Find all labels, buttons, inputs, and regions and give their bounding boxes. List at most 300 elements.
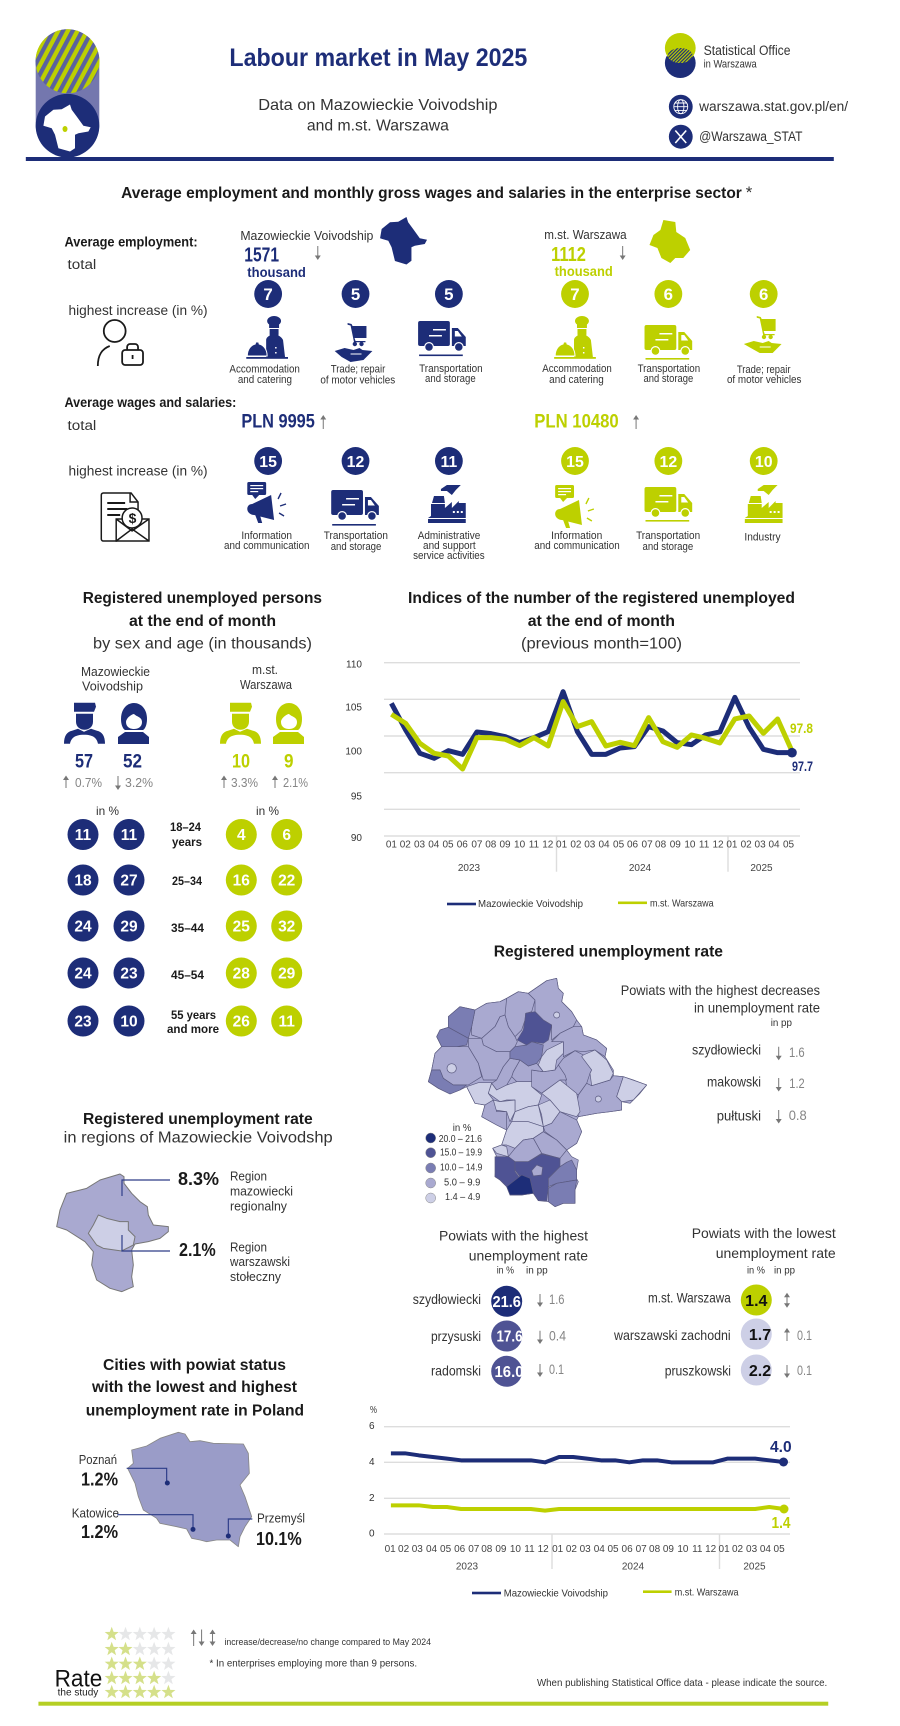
industry labels: Trade; repair <box>331 364 386 376</box>
heading: unemployment rate <box>469 1248 588 1264</box>
value labels: 97.7 <box>792 758 813 774</box>
industry labels: Industry <box>744 532 781 544</box>
value labels <box>790 720 813 774</box>
map legend: 15.0 – 19.9 <box>440 1148 482 1159</box>
heading: Powiats with the highest decreases <box>621 982 820 998</box>
in percent labels: in % <box>96 804 119 818</box>
heading <box>86 1357 304 1420</box>
y axis labels: 2 <box>369 1493 375 1504</box>
age circles: Warszawa: 4 <box>237 827 246 844</box>
age circles: Mazowieckie: 29 <box>120 918 138 936</box>
row: warszawski zachodni: 0.1 <box>797 1327 812 1343</box>
icon: document and envelope <box>101 493 149 541</box>
industry labels: Trade; repair <box>737 364 791 376</box>
value: Katowice: Katowice <box>72 1506 119 1521</box>
row: radomski: radomski <box>431 1363 481 1379</box>
x axis month labels: 04 <box>760 1544 771 1555</box>
increase badges: 5 <box>444 285 454 304</box>
x axis month labels: 2024 <box>629 863 652 874</box>
age labels: 55 years <box>171 1010 216 1022</box>
column labels: m.st. <box>252 663 278 677</box>
age labels: 35–44 <box>171 923 205 935</box>
row: pruszkowski <box>665 1354 812 1386</box>
line: Warszawa <box>391 702 792 769</box>
Warszawa wage: PLN 10480 <box>534 412 619 433</box>
industry labels: and support <box>423 540 476 552</box>
row: szydlowiecki: 21.6 <box>492 1294 521 1311</box>
x axis month labels: 12 <box>705 1544 717 1555</box>
x axis month labels: 2023 <box>456 1562 479 1573</box>
y axis labels: 4 <box>369 1457 375 1468</box>
x axis month labels: 10 <box>510 1544 521 1555</box>
x axis month labels: 11 <box>692 1544 703 1555</box>
row: pultuski <box>717 1107 807 1124</box>
x axis month labels <box>386 840 794 874</box>
icon: chef navy <box>246 316 288 359</box>
Warszawa total: thousand <box>555 263 613 279</box>
legend: Mazowieckie Voivodship <box>478 898 583 910</box>
age labels <box>167 822 219 1036</box>
age circles: Mazowieckie: 11 <box>121 827 138 844</box>
x axis month labels: 04 <box>598 840 610 851</box>
industry labels: and communication <box>224 540 309 552</box>
industry labels: Administrative <box>418 530 480 542</box>
icon: truck lime <box>645 325 692 360</box>
line: Mazowieckie <box>391 1453 783 1462</box>
x axis month labels: 08 <box>481 1544 493 1555</box>
increase badges <box>254 447 778 475</box>
row: warszawski zachodni <box>613 1318 812 1350</box>
rate the study label: the study <box>58 1688 98 1699</box>
icon: factory lime <box>745 485 783 523</box>
heading: Registered unemployment rate <box>83 1111 313 1128</box>
Mazowieckie total <box>240 228 373 280</box>
industry labels <box>229 363 802 386</box>
increase badges: 7 <box>263 285 273 304</box>
map legend: 5.0 – 9.9 <box>444 1178 481 1189</box>
row label: average employment: Average employment: <box>65 233 198 250</box>
industry labels: Transportation <box>638 363 700 375</box>
age circles: Mazowieckie: 10 <box>120 1014 138 1030</box>
column labels: Mazowieckie <box>81 665 150 679</box>
heading <box>692 1225 836 1277</box>
row: przysuski: 17.6 <box>496 1329 523 1346</box>
title: Labour market in May 2025 <box>229 44 527 72</box>
value: region mazowiecki <box>178 1169 293 1214</box>
x axis month labels: 09 <box>670 840 681 851</box>
icon: cart and hand lime <box>744 316 782 353</box>
map legend: in % <box>453 1123 472 1134</box>
x axis month labels: 2024 <box>622 1562 645 1573</box>
value labels: 97.8 <box>790 720 813 736</box>
x axis month labels: 02 <box>400 840 411 851</box>
industry labels: Information <box>241 530 292 542</box>
heading: at the end of month <box>528 613 675 630</box>
heading: in pp <box>526 1265 548 1277</box>
panel: registered unemployed persons <box>63 590 322 1036</box>
line: Warszawa <box>391 1505 784 1511</box>
y axis labels: 90 <box>351 833 362 844</box>
icon: megaphone navy <box>247 482 286 523</box>
value labels: 4.0 <box>770 1439 792 1456</box>
increase badges: 11 <box>440 454 457 471</box>
website link: warszawa.stat.gov.pl/en/ <box>698 98 848 114</box>
totals: 10 <box>232 752 250 773</box>
panel: regions of Mazowieckie <box>57 1111 333 1292</box>
row: makowski: 1.2 <box>789 1075 805 1091</box>
value labels <box>770 1439 792 1532</box>
Mazowieckie total: Mazowieckie Voivodship <box>240 228 373 243</box>
row: makowski: makowski <box>707 1074 761 1090</box>
age circles: Warszawa: 32 <box>278 918 295 936</box>
value: Przemysl: Przemyśl <box>257 1511 305 1526</box>
legend <box>472 1587 739 1600</box>
heading <box>621 982 820 1029</box>
x axis month labels: 02 <box>741 840 752 851</box>
value: region warszawski: warszawski <box>229 1254 290 1269</box>
subtitle <box>258 97 498 135</box>
x axis month labels: 05 <box>774 1544 785 1555</box>
value: region mazowiecki: regionalny <box>230 1199 287 1214</box>
heading: by sex and age (in thousands) <box>93 636 312 653</box>
x axis month labels: 12 <box>542 840 554 851</box>
x axis month labels: 05 <box>442 840 454 851</box>
x axis month labels: 08 <box>485 840 497 851</box>
value: Poznan: 1.2% <box>81 1470 118 1490</box>
age circles: Warszawa: 25 <box>233 918 250 936</box>
map: Warszawa silhouette <box>649 220 690 263</box>
x axis month labels: 03 <box>755 840 766 851</box>
age circles: Mazowieckie: 27 <box>120 872 138 890</box>
x axis month labels: 05 <box>440 1544 452 1555</box>
icon: chef lime <box>554 316 596 359</box>
logo: Statistical Office in Warszawa <box>665 33 791 78</box>
age circles: Mazowieckie: 24 <box>74 918 92 936</box>
y axis labels <box>369 1405 377 1540</box>
panel: wages <box>65 394 783 562</box>
in percent labels <box>96 804 279 818</box>
heading: Powiats with the lowest <box>692 1225 836 1241</box>
industry labels: Transportation <box>324 530 388 542</box>
changes: 3.2% <box>125 775 153 790</box>
x axis month labels <box>385 1544 785 1573</box>
y axis labels <box>345 660 362 844</box>
header emblem: pill with striped circle and map <box>36 29 100 157</box>
x axis month labels: 01 <box>386 840 397 851</box>
age circles: Warszawa: 29 <box>278 966 296 982</box>
x axis month labels: 2023 <box>458 863 481 874</box>
panel: highest decreases <box>621 982 820 1124</box>
increase badges: 6 <box>664 285 673 304</box>
x axis month labels: 04 <box>426 1544 437 1555</box>
increase badges: 6 <box>759 285 768 304</box>
logo: Statistical Office in Warszawa: Statistical Office <box>704 42 791 58</box>
industry labels: and catering <box>549 374 604 386</box>
row label: total: total <box>68 256 96 272</box>
row: radomski <box>431 1356 564 1387</box>
x axis month labels: 2025 <box>743 1562 766 1573</box>
arrows legend <box>191 1630 431 1648</box>
x axis month labels: 11 <box>699 840 710 851</box>
subtitle: Data on Mazowieckie Voivodship <box>258 97 498 114</box>
age labels: and more <box>167 1024 219 1036</box>
heading: Indices of the number of the registered unemployed <box>408 590 795 607</box>
industry labels: and storage <box>643 541 693 553</box>
row: pruszkowski: 0.1 <box>797 1362 812 1378</box>
arrows legend: increase/decrease/no change compared to May 2024 <box>224 1637 431 1648</box>
Mazowieckie total: 1571 <box>244 244 279 267</box>
row: szydlowiecki: 1.6 <box>549 1291 565 1307</box>
value: region warszawski: stołeczny <box>230 1269 281 1284</box>
row: warszawski zachodni: warszawski zachodni <box>613 1327 731 1343</box>
x axis month labels: 03 <box>580 1544 591 1555</box>
x axis month labels: 04 <box>428 840 440 851</box>
x axis month labels: 09 <box>663 1544 674 1555</box>
Mazowieckie wage: PLN 9995 <box>241 412 315 433</box>
value: region mazowiecki: mazowiecki <box>230 1184 293 1199</box>
Warszawa total <box>544 227 627 279</box>
totals: 57 <box>75 752 93 773</box>
x axis month labels: 06 <box>457 840 468 851</box>
changes: 2.1% <box>283 775 308 790</box>
x axis month labels: 08 <box>649 1544 661 1555</box>
map: two regions <box>57 1174 170 1292</box>
row: m.st. Warszawa <box>648 1284 790 1316</box>
increase badges: 12 <box>660 454 677 471</box>
x axis month labels: 02 <box>732 1544 743 1555</box>
value: Poznan: Poznań <box>79 1452 117 1467</box>
industry labels: and catering <box>238 374 292 386</box>
in percent labels: in % <box>256 804 279 818</box>
x axis month labels: 07 <box>471 840 483 851</box>
y axis labels: 6 <box>369 1421 375 1432</box>
heading: Cities with powiat status <box>103 1357 286 1374</box>
legend: m.st. Warszawa <box>675 1587 739 1599</box>
row: warszawski zachodni: 1.7 <box>749 1327 771 1344</box>
x axis month labels: 02 <box>398 1544 410 1555</box>
industry labels <box>224 530 781 562</box>
icon: female navy <box>118 703 149 744</box>
icon: cart and hand navy <box>335 323 372 362</box>
x axis month labels: 01 <box>385 1544 396 1555</box>
industry labels: and storage <box>425 373 476 385</box>
map legend <box>426 1123 483 1203</box>
row: przysuski: przysuski <box>431 1328 481 1344</box>
legend <box>447 898 714 910</box>
x axis month labels: 11 <box>524 1544 535 1555</box>
row: makowski <box>707 1074 805 1092</box>
row label: highest increase: highest increase (in %) <box>69 463 208 479</box>
heading: Registered unemployed persons <box>83 590 322 607</box>
heading: with the lowest and highest <box>91 1379 298 1396</box>
rate the study label: Rate <box>55 1666 102 1693</box>
row label: highest increase: highest increase (in %) <box>69 302 208 318</box>
X account: @Warszawa_STAT <box>699 128 803 144</box>
line: Mazowieckie <box>391 692 792 758</box>
totals: 9 <box>284 752 294 773</box>
row: radomski: 0.1 <box>549 1361 564 1377</box>
icon: megaphone lime <box>555 485 594 528</box>
x axis month labels: 09 <box>499 840 511 851</box>
x axis month labels: 10 <box>684 840 696 851</box>
x axis month labels: 06 <box>622 1544 633 1555</box>
row: pultuski: 0.8 <box>789 1107 807 1123</box>
x axis month labels: 07 <box>636 1544 647 1555</box>
row: m.st. Warszawa: m.st. Warszawa <box>648 1290 731 1306</box>
increase badges: 7 <box>570 285 580 304</box>
changes <box>63 775 308 790</box>
panel: employment <box>65 217 802 386</box>
panel: lowest unemployment rate <box>613 1225 836 1386</box>
industry labels: Transportation <box>636 530 700 542</box>
icon: truck lime <box>645 487 692 522</box>
x axis month labels: 08 <box>655 840 667 851</box>
age labels: 45–54 <box>171 970 205 982</box>
x axis month labels: 03 <box>414 840 425 851</box>
row: szydlowiecki: 1.6 <box>789 1044 805 1060</box>
x axis month labels: 09 <box>495 1544 507 1555</box>
industry labels: Transportation <box>419 363 483 375</box>
industry labels: Accommodation <box>542 363 612 375</box>
icon: male navy <box>64 703 105 744</box>
row: przysuski: 0.4 <box>549 1328 566 1344</box>
column labels: Warszawa <box>240 678 292 692</box>
value: Katowice: 1.2% <box>81 1522 118 1542</box>
map legend: 1.4 – 4.9 <box>445 1192 481 1203</box>
icon: truck navy <box>331 490 379 526</box>
value: region mazowiecki: Region <box>230 1169 267 1184</box>
row: szydlowiecki: szydłowiecki <box>692 1042 761 1058</box>
panel: highest unemployment rate <box>413 1228 588 1387</box>
x axis month labels: 01 <box>552 1544 564 1555</box>
changes: 0.7% <box>75 775 102 790</box>
panel: indices chart <box>345 590 813 910</box>
value: Poznan <box>79 1452 118 1490</box>
age circles: Mazowieckie: 18 <box>74 872 92 890</box>
y axis labels: 110 <box>346 660 362 670</box>
row: pruszkowski: pruszkowski <box>665 1363 731 1379</box>
legend: Mazowieckie Voivodship <box>504 1588 608 1600</box>
icon: document and envelope: $ <box>129 510 137 526</box>
totals <box>75 752 294 773</box>
column labels <box>81 663 292 694</box>
age circles: Mazowieckie: 24 <box>74 966 92 982</box>
x axis month labels: 01 <box>556 840 568 851</box>
x axis month labels: 02 <box>566 1544 577 1555</box>
industry labels: and storage <box>644 373 693 385</box>
heading: in unemployment rate <box>694 1000 820 1016</box>
x axis month labels: 05 <box>607 1544 619 1555</box>
value: region mazowiecki: 8.3% <box>178 1169 219 1189</box>
industry labels: Accommodation <box>229 364 300 376</box>
increase badges: 10 <box>755 454 773 471</box>
y axis labels: 95 <box>351 792 362 802</box>
section heading: employment and wages: * <box>746 183 753 202</box>
x axis month labels: 03 <box>584 840 596 851</box>
end point marker <box>787 748 797 758</box>
age circles: Warszawa: 11 <box>279 1014 295 1030</box>
icon: male lime <box>220 703 261 744</box>
heading: in pp <box>774 1265 795 1277</box>
Warszawa total: 1112 <box>551 244 586 266</box>
age circles: Warszawa: 28 <box>233 966 250 982</box>
X account <box>669 125 803 149</box>
age circles: Warszawa: 22 <box>278 872 295 890</box>
legend: m.st. Warszawa <box>650 898 714 910</box>
industry labels: of motor vehicles <box>320 374 396 386</box>
rate the study: star grid <box>105 1627 175 1698</box>
column labels: Voivodship <box>82 680 143 694</box>
icon: factory navy <box>428 485 466 523</box>
Mazowieckie total: thousand <box>247 264 306 280</box>
age circles: Mazowieckie <box>68 819 144 1036</box>
Warszawa total: m.st. Warszawa <box>544 227 627 242</box>
value labels: 1.4 <box>772 1515 791 1532</box>
industry labels: and communication <box>534 540 620 552</box>
map: powiats of Mazowieckie <box>428 978 647 1207</box>
panel: unemployment rate chart <box>369 1405 792 1600</box>
x axis month labels: 01 <box>726 840 738 851</box>
heading <box>439 1228 588 1277</box>
map: Poland <box>117 1432 252 1547</box>
heading <box>83 590 322 653</box>
age circles: Warszawa: 16 <box>233 872 250 890</box>
x axis month labels: 12 <box>538 1544 549 1555</box>
x axis month labels: 01 <box>719 1544 730 1555</box>
increase badges: 12 <box>347 454 364 471</box>
value: region warszawski: 2.1% <box>179 1240 216 1260</box>
x axis month labels: 04 <box>594 1544 605 1555</box>
age circles: Warszawa <box>226 819 302 1036</box>
x axis month labels: 10 <box>677 1544 689 1555</box>
footnote: * In enterprises employing more than 9 persons. <box>210 1658 417 1669</box>
age circles: Warszawa: 26 <box>233 1014 250 1030</box>
x axis month labels: 03 <box>746 1544 758 1555</box>
x axis month labels: 05 <box>613 840 625 851</box>
heading: (previous month=100) <box>521 636 682 653</box>
x axis month labels: 07 <box>642 840 653 851</box>
age labels: 18–24 <box>170 822 202 834</box>
x axis month labels: 07 <box>468 1544 480 1555</box>
heading: in pp <box>771 1017 792 1029</box>
heading: registered unemployment rate: Registered unemployment rate <box>494 944 723 961</box>
age circles: Mazowieckie: 23 <box>74 1014 92 1030</box>
heading: unemployment rate in Poland <box>86 1403 304 1420</box>
age circles: Mazowieckie: 23 <box>120 966 138 982</box>
x axis month labels: 10 <box>514 840 526 851</box>
value: Katowice <box>72 1506 119 1542</box>
map legend: 20.0 – 21.6 <box>439 1134 482 1145</box>
x axis month labels: 03 <box>412 1544 423 1555</box>
increase badges: 15 <box>259 454 277 471</box>
map legend: 10.0 – 14.9 <box>440 1163 483 1174</box>
section heading: employment and wages: Average employment and monthly gross wages and salaries in the enterprise sector <box>121 185 742 202</box>
y axis labels: 100 <box>345 746 362 758</box>
industry labels: and storage <box>331 541 381 553</box>
age labels: 25–34 <box>172 876 203 888</box>
row label: average wages: Average wages and salaries: <box>65 394 236 410</box>
row: pruszkowski: 2.2 <box>749 1363 771 1380</box>
increase badges: 15 <box>566 454 584 471</box>
source note: When publishing Statistical Office data - please indicate the source. <box>537 1678 827 1689</box>
x axis month labels: 04 <box>768 840 780 851</box>
y axis labels: % <box>370 1405 377 1416</box>
heading: Powiats with the highest <box>439 1228 588 1244</box>
heading: in % <box>747 1265 765 1277</box>
x axis month labels: 02 <box>570 840 582 851</box>
totals: 52 <box>123 752 142 773</box>
industry labels: of motor vehicles <box>727 374 802 386</box>
